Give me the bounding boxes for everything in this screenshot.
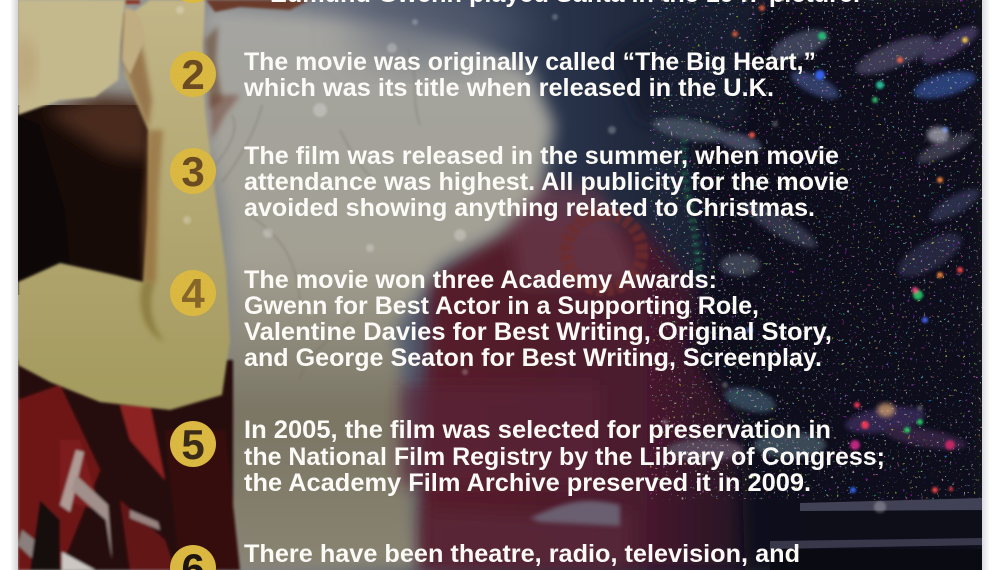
fact 4 text: The movie won three Academy Awards: xyxy=(244,266,717,294)
maroon Santa coat xyxy=(415,175,760,570)
fact 4 text: and George Seaton for Best Writing, Screenplay. xyxy=(244,344,822,372)
child's arm and hand xyxy=(18,0,230,410)
lower left plaid shirt xyxy=(18,360,240,570)
fact 3 text: avoided showing anything related to Christmas. xyxy=(244,194,815,222)
fairy lights xyxy=(650,0,982,500)
icon: number badge 1 xyxy=(170,0,216,3)
icon: number badge 3 xyxy=(170,148,216,195)
fact 5 text: the National Film Registry by the Library of Congress; xyxy=(244,443,885,471)
fact 5 text: In 2005, the film was selected for preservation in xyxy=(244,416,831,444)
icon: number badge 5: 5 xyxy=(181,421,205,468)
dark Christmas tree xyxy=(530,0,984,570)
wreath xyxy=(566,214,642,290)
beard strand detail xyxy=(216,52,420,285)
fact 4 text xyxy=(244,266,832,372)
icon: number badge 2: 2 xyxy=(181,51,205,98)
icon: number badge 4: 4 xyxy=(181,270,205,317)
child's face xyxy=(18,0,145,115)
falling snow bokeh xyxy=(176,6,923,513)
fact 4 text: Valentine Davies for Best Writing, Original Story, xyxy=(244,318,832,346)
fact 3 text xyxy=(244,142,849,222)
coat speckle and sequin texture xyxy=(400,385,630,570)
icon: number badge 3: 3 xyxy=(181,148,205,195)
icon: number badge 5 xyxy=(170,421,216,468)
Santa beard xyxy=(205,8,555,570)
fact 3 text: The film was released in the summer, when movie xyxy=(244,142,839,170)
icon: number badge 6 xyxy=(170,545,216,570)
fact 2 text: The movie was originally called “The Big Heart,” xyxy=(244,48,816,76)
snow-covered fence xyxy=(770,498,982,570)
fact 2 text: which was its title when released in the U.K. xyxy=(243,74,774,102)
grey-blue shading at beard top xyxy=(350,0,530,60)
fact 6 text: There have been theatre, radio, television, and xyxy=(244,540,800,568)
icon: number badge 2 xyxy=(170,51,216,98)
fact 2 text xyxy=(243,48,816,102)
fact 5 text: the Academy Film Archive preserved it in 2009. xyxy=(244,469,811,497)
fact 4 text: Gwenn for Best Actor in a Supporting Role, xyxy=(244,292,759,320)
fact 3 text: attendance was highest. All publicity for the movie xyxy=(244,168,849,196)
fact 5 text xyxy=(244,416,885,497)
fur collar edge at top xyxy=(205,0,310,140)
dark hair and shirt shadow xyxy=(18,84,150,295)
icon: number badge 4 xyxy=(170,270,216,317)
green garland xyxy=(678,100,700,280)
